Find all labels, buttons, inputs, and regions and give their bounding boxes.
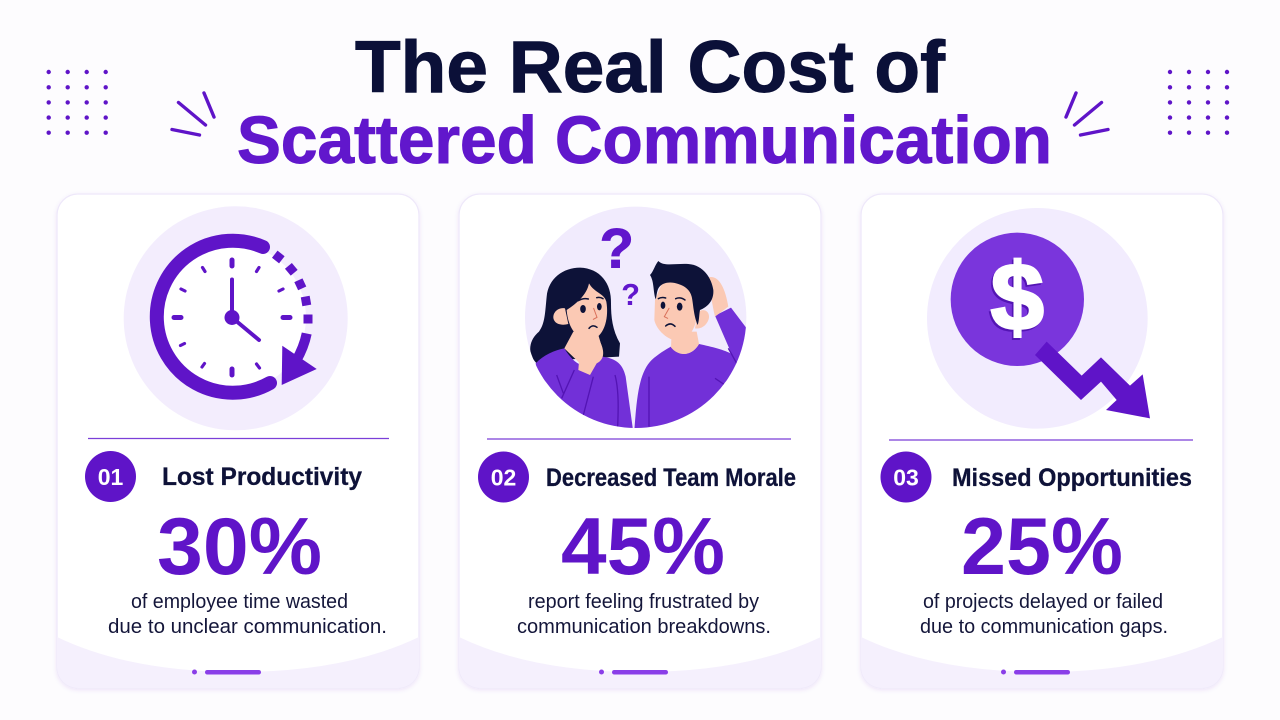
heading: Decreased Team Morale [546, 464, 796, 492]
description: of employee time wasted [131, 591, 348, 613]
burst right [1066, 93, 1108, 135]
woman hair [530, 268, 620, 363]
panel: missed opportunities [861, 194, 1223, 688]
woman neck [564, 332, 602, 362]
number badge 01 [85, 451, 136, 502]
icon: confused couple: ? [621, 278, 640, 312]
description [108, 591, 387, 638]
description [920, 591, 1168, 638]
icon: falling dollar: $ [989, 246, 1042, 352]
man hair [650, 261, 713, 325]
pagination marks [599, 670, 668, 674]
man ear [695, 310, 709, 329]
dot grid right [1168, 70, 1229, 135]
description: report feeling frustrated by [528, 591, 759, 613]
statistic: 30% [157, 502, 322, 592]
title [237, 27, 1052, 178]
description: communication breakdowns. [517, 616, 771, 638]
card footer wave [861, 637, 1223, 688]
divider [889, 439, 1193, 441]
description: due to unclear communication. [108, 616, 387, 638]
title line 1: The Real Cost of [355, 27, 946, 108]
pagination marks [1001, 670, 1070, 674]
question marks: ? [600, 216, 634, 279]
statistic: 45% [561, 502, 725, 592]
icon: clock with arrow [124, 206, 348, 430]
heading: Lost Productivity [162, 463, 362, 491]
man face [654, 280, 698, 341]
man hand [707, 277, 728, 317]
divider [487, 438, 791, 440]
number badge 02: 02 [491, 464, 516, 490]
woman body [536, 348, 633, 430]
statistic: 25% [961, 502, 1123, 592]
number badge 03 [880, 452, 932, 502]
card footer wave [459, 637, 821, 688]
description: due to communication gaps. [920, 616, 1168, 638]
panel: decreased team morale [459, 194, 821, 688]
panel: lost productivity [57, 194, 419, 688]
card background [861, 194, 1223, 688]
description [517, 591, 771, 638]
divider [88, 438, 389, 440]
pagination marks [192, 670, 261, 674]
woman face [567, 283, 607, 340]
man neck [671, 332, 699, 354]
faces [580, 302, 682, 313]
dot grid left [46, 70, 108, 135]
icon: confused couple [525, 207, 747, 430]
icon: falling dollar [927, 208, 1150, 429]
number badge 02 [478, 452, 529, 502]
card background [57, 194, 419, 688]
heading: Missed Opportunities [952, 464, 1192, 492]
woman hand [578, 338, 603, 375]
burst left [172, 93, 214, 135]
description: of projects delayed or failed [923, 591, 1163, 613]
card background [459, 194, 821, 688]
number badge 01: 01 [98, 464, 123, 490]
woman ear [553, 308, 568, 325]
icon: falling dollar: $ [991, 244, 1044, 350]
man body [634, 308, 747, 430]
card footer wave [57, 637, 419, 688]
title line 2: Scattered Communication [237, 103, 1052, 178]
number badge 03: 03 [893, 464, 919, 490]
